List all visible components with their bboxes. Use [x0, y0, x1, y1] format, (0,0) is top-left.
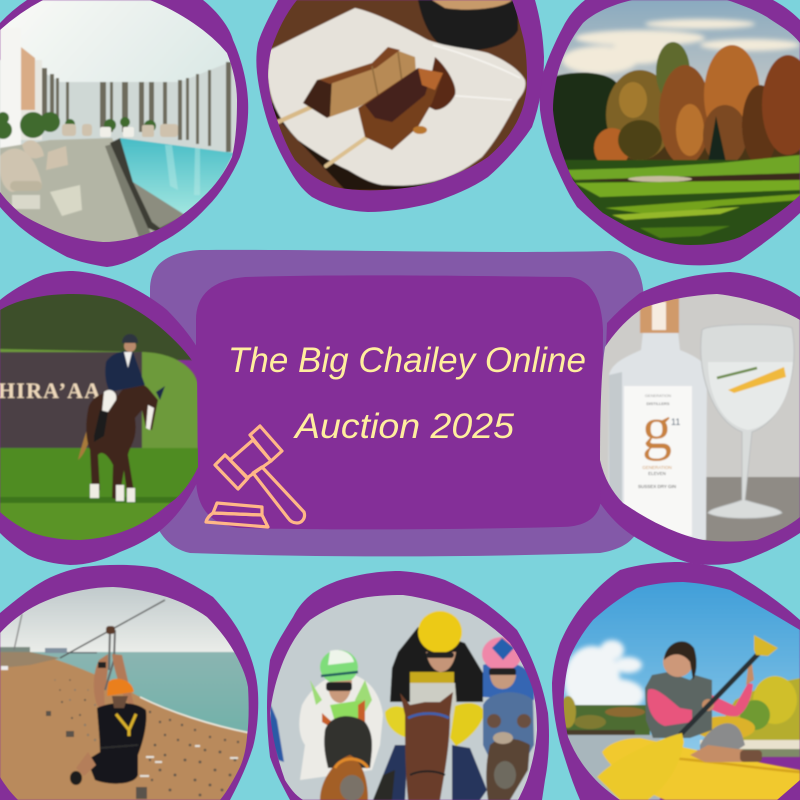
figure: horse and rider: [78, 334, 165, 502]
title: [228, 341, 586, 446]
panel: show jumping horse photo: [0, 271, 200, 565]
panel: spa pool photo: [0, 0, 260, 267]
panel: autumn golf course photo: [540, 0, 800, 265]
panel: horse racing jockeys photo: [265, 571, 549, 800]
panel: gin bottle and glass photo: SUSSEX DRY GIN: [638, 484, 676, 489]
panel: kayaking woman photo: [552, 562, 800, 800]
title: Auction 2025: [293, 407, 515, 446]
panel: gin bottle and glass photo: DISTILLERS: [647, 401, 670, 406]
panel: title backing, dark purple: [196, 275, 603, 529]
panel: gin bottle and glass photo: GENERATION: [642, 465, 672, 470]
panel: gin bottle and glass photo: ELEVEN: [648, 471, 666, 476]
panel: gin bottle and glass photo: g: [642, 395, 672, 461]
panel: beach zip wire photo: [0, 565, 258, 800]
title: The Big Chailey Online: [228, 341, 586, 380]
icon: auction gavel: [206, 426, 305, 527]
panel: gin bottle and glass photo: [590, 272, 800, 565]
panel: show jumping horse photo: HIRA’AA: [0, 378, 101, 403]
panel: title backing, light purple: [150, 250, 645, 556]
panel: skewers on plate photo: [256, 0, 544, 212]
panel: gin bottle and glass photo: 11: [671, 417, 680, 427]
panel: gin bottle and glass photo: GENERATION: [645, 393, 671, 398]
